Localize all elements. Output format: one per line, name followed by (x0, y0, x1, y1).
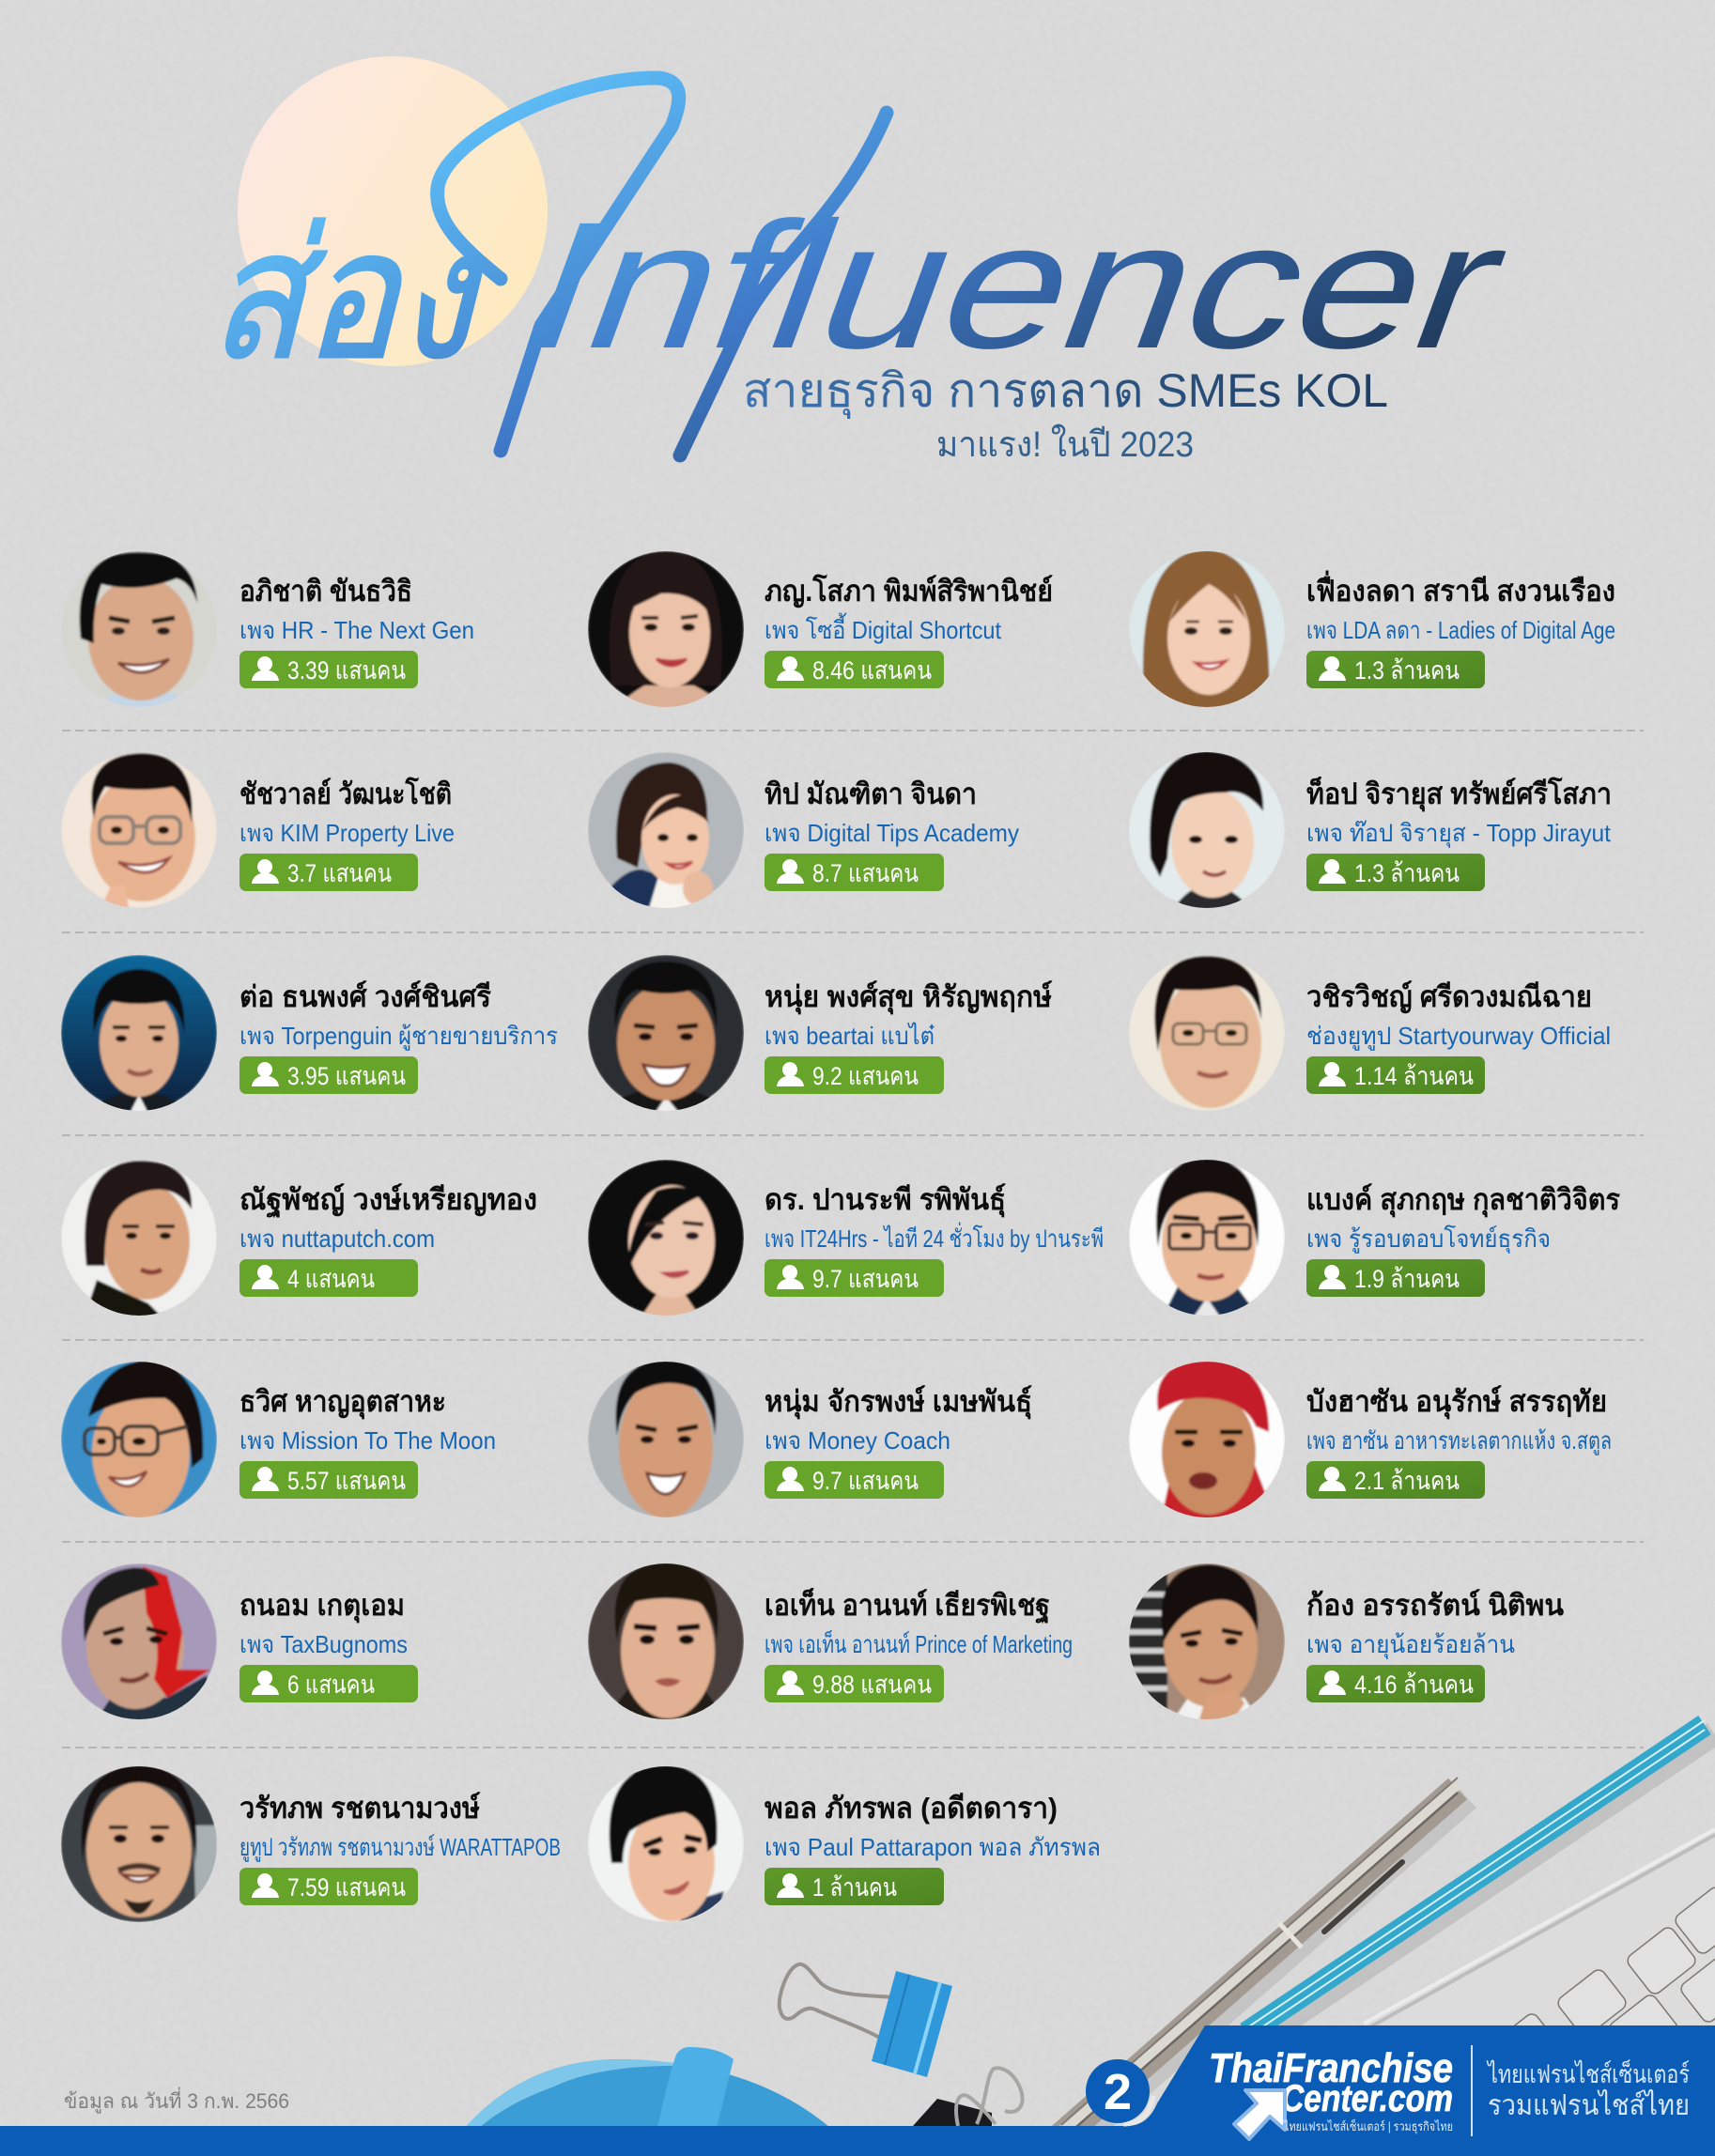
followers badge: 4 แสนคน (287, 1265, 375, 1293)
card: วรัทภพ (61, 1765, 561, 1922)
followers badge (239, 854, 418, 891)
name: หนุ่ม จักรพงษ์ เมษพันธุ์ (765, 1385, 1032, 1420)
card: แบงค์ สุภกฤษ (1129, 1159, 1620, 1322)
followers badge: 9.7 แสนคน (812, 1467, 919, 1495)
card: ภญ.โสภา (588, 551, 1053, 714)
name: พอล ภัทรพล (อดีตดารา) (765, 1792, 1058, 1825)
portrait (1129, 1361, 1285, 1524)
portrait (1129, 751, 1285, 915)
page: เพจ TaxBugnoms (239, 1630, 408, 1658)
logo: ThaiFranchise Center.com (1209, 2045, 1453, 2139)
followers badge (1306, 1461, 1485, 1499)
followers badge: 3.95 แสนคน (287, 1062, 406, 1090)
name: ทิป มัณฑิตา จินดา (765, 778, 977, 810)
followers badge: 6 แสนคน (287, 1671, 375, 1699)
portrait (61, 1361, 217, 1518)
card: เฟื่องลดา (1129, 550, 1615, 714)
portrait (61, 1563, 217, 1726)
card: อภิชาติ (61, 551, 474, 714)
followers badge: 1.3 ล้านคน (1354, 859, 1460, 887)
followers badge (239, 1665, 418, 1702)
logo: ThaiFranchise Center.com: ไทยแฟรนไชส์เซ็นเตอร์ | รวมธุรกิจไทย (1283, 2118, 1453, 2134)
followers badge (765, 651, 944, 688)
followers badge (765, 1259, 944, 1297)
tagline: รวมแฟรนไชส์ไทย (1488, 2088, 1690, 2121)
followers badge: 1.14 ล้านคน (1354, 1062, 1474, 1090)
portrait (1129, 1563, 1285, 1726)
card: ชัชวาลย์ (61, 752, 455, 915)
followers badge (239, 1461, 418, 1499)
blue pencil (1246, 1720, 1714, 2040)
logo: ThaiFranchise Center.com: Center.com (1281, 2078, 1453, 2119)
page: เพจ IT24Hrs - ไอที 24 ชั่วโมง by ปานระพี (765, 1222, 1104, 1253)
portrait (61, 1160, 217, 1322)
name: ชัชวาลย์ วัฒนะโชติ (239, 777, 452, 810)
page: เพจ beartai แบไต๋ (765, 1022, 935, 1050)
followers badge (765, 1056, 944, 1094)
name: ธวิศ หาญอุตสาหะ (239, 1385, 446, 1420)
page: เพจ Digital Tips Academy (765, 819, 1019, 847)
desk: paper sheet and keyboard (1364, 1829, 1715, 2126)
followers badge (1306, 1259, 1485, 1297)
card: ธวิศ (61, 1361, 496, 1518)
title block (199, 56, 1534, 465)
cup handle (657, 2047, 734, 2128)
name: วชิรวิชญ์ ศรีดวงมณีฉาย (1306, 980, 1592, 1014)
name: ภญ.โสภา พิมพ์สิริพานิชย์ (765, 574, 1053, 608)
page: เพจ เอเท็น อานนท์ Prince of Marketing (765, 1629, 1073, 1658)
portrait (1129, 550, 1285, 714)
page: เพจ LDA ลดา - Ladies of Digital Age (1306, 616, 1615, 644)
logo: ThaiFranchise Center.com: ThaiFranchise (1209, 2045, 1453, 2091)
card: หนุ่ม จักรพงษ์ (588, 1361, 1032, 1518)
card: ทิป มัณฑิตา (588, 752, 1019, 915)
followers badge (1306, 854, 1485, 891)
portrait (588, 955, 744, 1117)
blue binder clip (780, 1964, 952, 2077)
page: เพจ อายุน้อยร้อยล้าน (1306, 1630, 1515, 1659)
followers badge: 4.16 ล้านคน (1354, 1671, 1474, 1699)
page: เพจ ท๊อป จิรายุส - Topp Jirayut (1306, 819, 1612, 848)
portrait (588, 752, 744, 915)
page: เพจ Paul Pattarapon พอล ภัทรพล (765, 1833, 1101, 1861)
name: ดร. ปานระพี รพิพันธุ์ (765, 1183, 1006, 1218)
title word: ส่อง: ส่อง (199, 195, 512, 394)
card: ณัฐพัชญ์ (61, 1160, 537, 1322)
followers badge: 3.39 แสนคน (287, 656, 406, 685)
card: ถนอม (61, 1563, 418, 1726)
page: ยูทูป วรัทภพ รชตนามวงษ์ WARATTAPOB (239, 1833, 561, 1862)
name: เอเท็น อานนท์ เธียรพิเชฐ (765, 1587, 1050, 1625)
followers badge: 3.7 แสนคน (287, 859, 392, 887)
subtitle second line: มาแรง! ในปี 2023 (936, 424, 1194, 465)
followers badge (1306, 1665, 1485, 1702)
followers badge: 8.46 แสนคน (812, 656, 932, 685)
portrait (588, 1361, 744, 1518)
portrait (61, 1765, 217, 1922)
name: ณัฐพัชญ์ วงษ์เหรียญทอง (239, 1183, 537, 1219)
followers badge: 1.9 ล้านคน (1354, 1265, 1460, 1293)
silver pen (1061, 1778, 1465, 2141)
followers badge: 8.7 แสนคน (812, 859, 919, 887)
page: ช่องยูทูป Startyourway Official (1306, 1022, 1611, 1051)
page: เพจ Torpenguin ผู้ชายขายบริการ (239, 1022, 558, 1051)
card: เอเท็น (588, 1563, 1073, 1726)
page: เพจ HR - The Next Gen (239, 616, 474, 644)
card: ดร. ปานระพี (588, 1160, 1104, 1322)
followers badge (765, 1665, 944, 1702)
followers badge: 7.59 แสนคน (287, 1873, 406, 1902)
followers badge: 1.3 ล้านคน (1354, 656, 1460, 685)
name: ถนอม เกตุเอม (239, 1589, 405, 1624)
decorative flourish of the I and f (438, 78, 887, 455)
logo arrow (1234, 2090, 1285, 2139)
name: หนุ่ย พงศ์สุข หิรัญพฤกษ์ (765, 980, 1053, 1015)
keyboard keys (1489, 1885, 1715, 2083)
name: อภิชาติ ขันธวิธิ (239, 575, 412, 608)
portrait (61, 551, 217, 714)
portrait (1129, 955, 1285, 1111)
portrait (588, 551, 744, 714)
portrait (1129, 1159, 1285, 1322)
page: เพจ ฮาซัน อาหารทะเลตากแห้ง จ.สตูล (1306, 1426, 1612, 1455)
followers badge: 9.88 แสนคน (812, 1671, 932, 1699)
followers badge (239, 651, 418, 688)
name: วรัทภพ รชตนามวงษ์ (239, 1792, 481, 1825)
portrait (588, 1160, 744, 1322)
footer bar (0, 2025, 1715, 2156)
card: ต่อ ธนพงศ์ (61, 955, 558, 1117)
subtitle: สายธุรกิจ การตลาด SMEs KOL (743, 364, 1388, 419)
data date footnote: ข้อมูล ณ วันที่ 3 ก.พ. 2566 (64, 2087, 289, 2114)
portrait (588, 1563, 744, 1726)
name: แบงค์ สุภกฤษ กุลชาติวิจิตร (1306, 1183, 1620, 1218)
followers badge (765, 1868, 944, 1905)
followers badge: 1 ล้านคน (812, 1873, 897, 1902)
followers badge: 5.57 แสนคน (287, 1467, 406, 1495)
black binder clip (913, 2068, 1023, 2126)
followers badge (765, 1461, 944, 1499)
card: ก้อง อรรถรัตน์ (1129, 1563, 1564, 1726)
portrait (588, 1765, 744, 1929)
name: บังฮาซัน อนุรักษ์ สรรฤทัย (1306, 1385, 1607, 1420)
name: ก้อง อรรถรัตน์ นิติพน (1306, 1589, 1564, 1622)
followers badge: 9.7 แสนคน (812, 1265, 919, 1293)
portrait (61, 955, 217, 1117)
name: เฟื่องลดา สรานี สงวนเรือง (1306, 570, 1615, 608)
title word: Influencer: Influencer (501, 186, 1534, 387)
followers badge (1306, 651, 1485, 688)
page: เพจ Mission To The Moon (239, 1426, 496, 1455)
page: เพจ รู้รอบตอบโจทย์ธุรกิจ (1306, 1224, 1551, 1254)
page number circle (1086, 2059, 1153, 2124)
card: บังฮาซัน (1129, 1361, 1612, 1524)
followers badge: 2.1 ล้านคน (1354, 1467, 1460, 1495)
card: พอล ภัทรพล (588, 1765, 1101, 1929)
page: เพจ โซอี้ Digital Shortcut (765, 612, 1002, 644)
row dividers (62, 731, 1644, 1748)
followers badge (239, 1868, 418, 1905)
page: เพจ Money Coach (765, 1426, 950, 1455)
tagline (1486, 2057, 1690, 2121)
name: ต่อ ธนพงศ์ วงศ์ชินศรี (239, 980, 491, 1013)
followers badge (765, 854, 944, 891)
card: ท็อป จิรายุส (1129, 751, 1612, 915)
blue cup (465, 2047, 830, 2128)
card: หนุ่ย พงศ์สุข (588, 955, 1053, 1117)
followers badge: 9.2 แสนคน (812, 1062, 919, 1090)
page: เพจ KIM Property Live (239, 819, 455, 847)
name: ท็อป จิรายุส ทรัพย์ศรีโสภา (1306, 776, 1612, 812)
pastel sun circle (238, 56, 548, 366)
followers badge (239, 1259, 418, 1297)
portrait (61, 752, 217, 915)
followers badge (239, 1056, 418, 1094)
page: เพจ nuttaputch.com (239, 1224, 435, 1253)
page number circle: 2 (1104, 2064, 1132, 2120)
vertical divider (1471, 2045, 1473, 2136)
card: วชิรวิชญ์ (1129, 955, 1611, 1111)
followers badge (1306, 1056, 1485, 1094)
